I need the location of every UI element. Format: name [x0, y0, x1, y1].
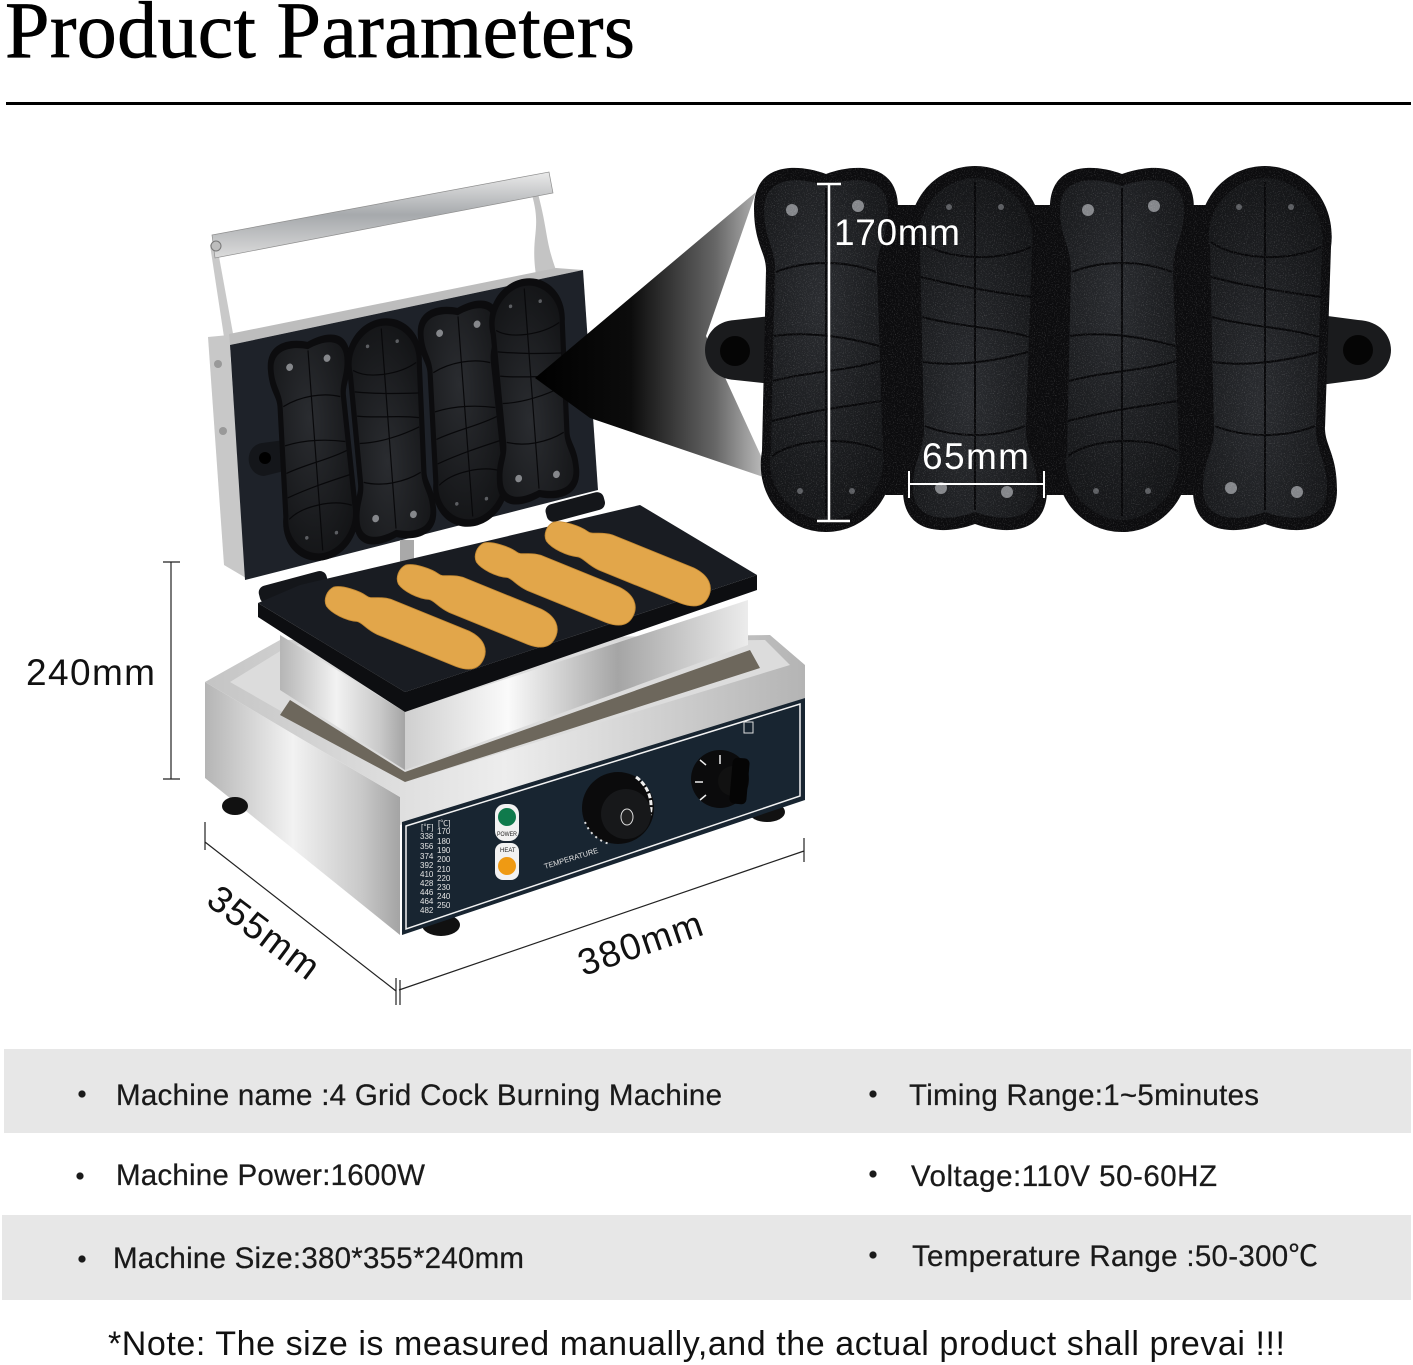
waffle machine [205, 172, 805, 936]
temperature table: 220 [437, 874, 451, 883]
temperature table: 428 [420, 879, 434, 888]
lower plate steel housing [280, 600, 748, 770]
temperature table: 210 [437, 865, 451, 874]
heat light: HEAT [500, 848, 516, 854]
temperature table: 410 [420, 870, 434, 879]
temperature table: 464 [420, 897, 434, 906]
upper plate ear [249, 440, 288, 476]
control panel: TEMPERATURE [543, 846, 599, 871]
power light [495, 804, 519, 841]
upper mould cavity 4 [482, 272, 581, 508]
base feet [222, 797, 785, 936]
temperature dial [582, 772, 654, 844]
dimension: width 380mm [399, 838, 804, 1005]
spec: temperature range: Temperature Range :50-300℃ [912, 1240, 1318, 1273]
temperature table: 392 [420, 861, 434, 870]
temperature table: 482 [420, 906, 434, 915]
temperature table: 190 [437, 846, 451, 855]
specification row backgrounds [2, 1049, 1411, 1300]
upper mould cavity 1 [266, 331, 365, 567]
dimension: mould width 65mm: 65mm [922, 436, 1029, 477]
dimension: height 240mm: 240mm [26, 652, 155, 693]
temperature table: 170 [437, 827, 451, 836]
temperature table: 240 [437, 892, 451, 901]
dimension: mould width 65mm [909, 436, 1044, 498]
dimension: width 380mm: 380mm [573, 903, 708, 984]
dimension: depth 355mm [200, 822, 396, 1005]
dimension: height 240mm [26, 562, 180, 779]
note: *Note: The size is measured manually,and the actual product shall prevai !!! [108, 1325, 1285, 1363]
spec: timing range: Timing Range:1~5minutes [909, 1079, 1259, 1112]
waffle 1 [319, 577, 492, 675]
power light: POWER [497, 831, 517, 838]
dimension: mould height 170mm [817, 184, 960, 521]
hinges [257, 491, 607, 605]
base left side [205, 682, 400, 935]
lower plate [258, 505, 757, 712]
enlarged mould plate [705, 165, 1391, 533]
heat light [495, 843, 519, 880]
upper mould cavity 3 [416, 297, 515, 533]
timer dial [691, 750, 750, 808]
temperature table: 374 [420, 852, 434, 861]
upper plate [230, 270, 598, 580]
temperature table: 338 [420, 832, 434, 841]
temperature table: 446 [420, 888, 434, 897]
temperature table: 356 [420, 842, 434, 851]
temperature table: [℉] [421, 823, 433, 832]
waffle 4 [539, 512, 717, 612]
temperature table: 180 [437, 837, 451, 846]
callout cone from plate to enlarged mould [535, 192, 772, 480]
base top rim [205, 635, 805, 825]
dimension: depth 355mm: 355mm [200, 877, 328, 988]
mould cavity 2 [903, 166, 1047, 530]
mould cavity 3 [1050, 168, 1194, 532]
spec: machine power: Machine Power:1600W [116, 1159, 425, 1192]
upper plate back strip [229, 268, 583, 345]
upper mould cavity 2 [339, 312, 438, 548]
left mounting ear [705, 315, 782, 385]
mould cavity 4 [1193, 166, 1337, 530]
temperature table: 230 [437, 883, 451, 892]
right mounting ear [1320, 315, 1391, 385]
waffle 2 [391, 555, 564, 653]
waffle 3 [469, 533, 642, 631]
handle [210, 172, 556, 350]
temperature table [420, 819, 451, 915]
control panel [402, 698, 805, 935]
dimension: mould height 170mm: 170mm [834, 212, 960, 253]
spec: voltage: Voltage:110V 50-60HZ [911, 1160, 1217, 1193]
timer symbol [744, 722, 753, 733]
spec: machine name: Machine name :4 Grid Cock Burning Machine [116, 1079, 722, 1112]
temperature table: 250 [437, 901, 451, 910]
spec: machine size: Machine Size:380*355*240mm [113, 1242, 524, 1275]
temperature table: 200 [437, 855, 451, 864]
left hinge arm [208, 335, 246, 578]
temperature table: [℃] [438, 819, 450, 828]
mould cavity 1 [754, 168, 898, 532]
